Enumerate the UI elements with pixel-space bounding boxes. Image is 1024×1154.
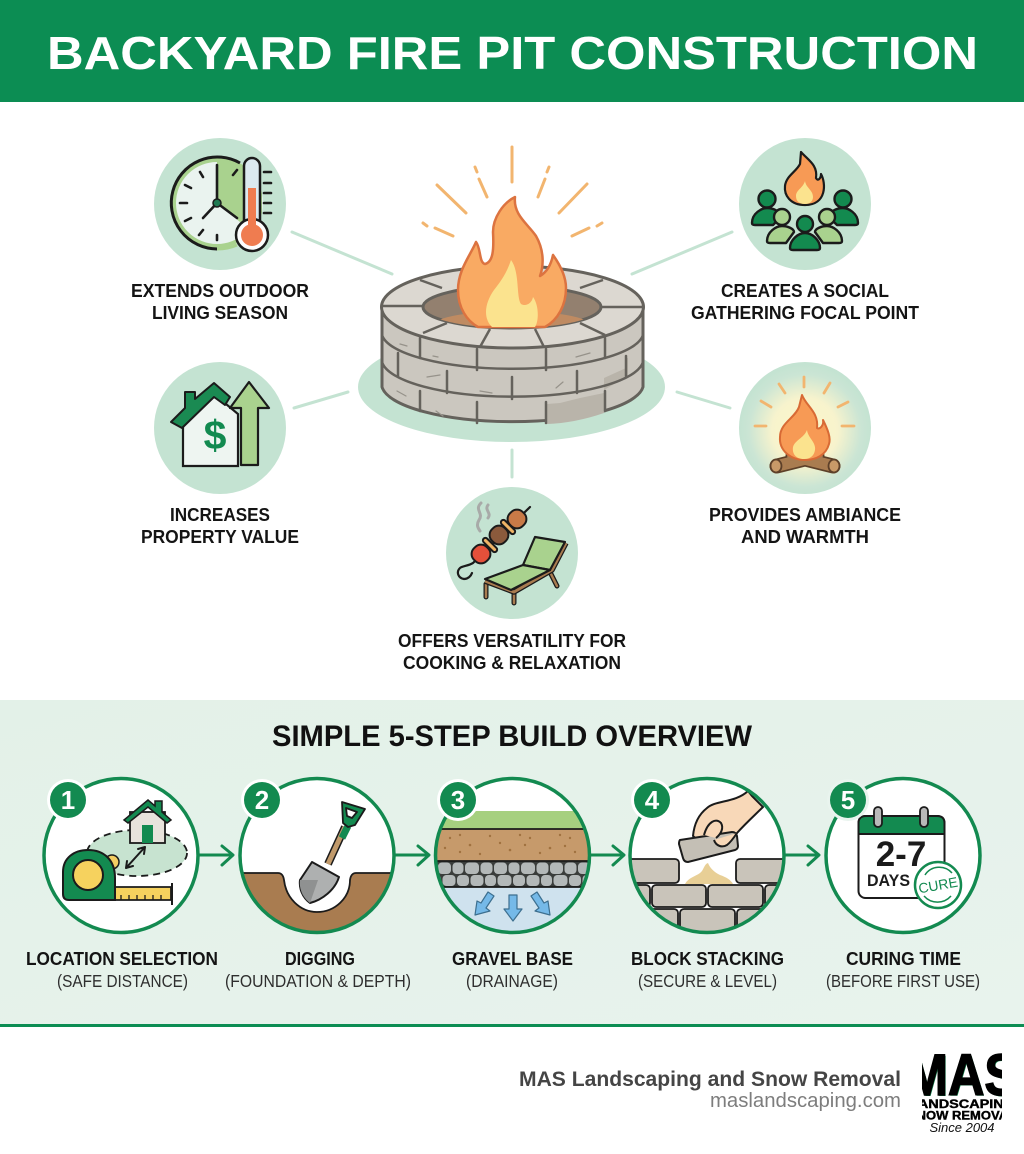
panel: 5-step build overview <box>0 700 1024 1027</box>
step 3 label: GRAVEL BASE <box>452 948 573 969</box>
arrow: 2 to 3 <box>395 846 429 865</box>
step 2: digging <box>240 778 395 940</box>
footer company name: maslandscaping.com <box>710 1090 901 1112</box>
label <box>709 504 901 547</box>
section heading: SIMPLE 5-STEP BUILD OVERVIEW <box>272 720 753 753</box>
step 1 label <box>26 948 218 991</box>
number badge 3: 3 <box>451 785 465 815</box>
label: COOKING & RELAXATION <box>403 652 621 673</box>
label: LIVING SEASON <box>152 302 288 323</box>
label: OFFERS VERSATILITY FOR <box>398 630 626 651</box>
label: PROVIDES AMBIANCE <box>709 504 901 525</box>
step 5: curing time: 2-7 <box>876 835 926 874</box>
step 5 label: (BEFORE FIRST USE) <box>826 971 980 991</box>
step 1: location selection <box>44 778 198 932</box>
step 3 label <box>452 948 573 991</box>
arrow: 4 to 5 <box>785 846 819 865</box>
logo: SNOW REMOVAL <box>908 1108 1016 1122</box>
icon: campfire <box>739 362 871 494</box>
connector lines <box>292 232 732 477</box>
step 3: gravel base <box>430 778 600 937</box>
number badge 5 <box>827 779 869 821</box>
step 3 label: (DRAINAGE) <box>466 971 558 991</box>
step 5 label: CURING TIME <box>846 948 961 969</box>
label: EXTENDS OUTDOOR <box>131 280 309 301</box>
arrow: 1 to 2 <box>199 846 233 865</box>
number badge 1: 1 <box>61 785 75 815</box>
step 4: block stacking <box>628 776 786 934</box>
arrow: 3 to 4 <box>590 846 624 865</box>
step 4 label <box>631 948 784 991</box>
icon: people around fire <box>739 138 871 270</box>
step 5: curing time <box>826 778 980 932</box>
number badge 2: 2 <box>255 785 269 815</box>
label <box>141 504 299 547</box>
step 1 label: (SAFE DISTANCE) <box>57 971 188 991</box>
label: CREATES A SOCIAL <box>721 280 889 301</box>
label <box>398 630 626 673</box>
logo: LANDSCAPING <box>909 1097 1015 1111</box>
step 5 label <box>826 948 980 991</box>
title: BACKYARD FIRE PIT CONSTRUCTION <box>47 27 978 79</box>
number badge 5: 5 <box>841 785 855 815</box>
step 5: curing time: CURE <box>917 874 959 896</box>
flame <box>458 197 566 327</box>
inner flame <box>486 260 538 327</box>
label <box>691 280 920 323</box>
central fire pit illustration <box>358 147 665 442</box>
number badge 3 <box>437 779 479 821</box>
step 5: curing time: DAYS <box>867 872 910 890</box>
logo: Since 2004 <box>929 1120 995 1135</box>
stone wall <box>382 307 643 424</box>
label: GATHERING FOCAL POINT <box>691 302 920 323</box>
step 1 label: LOCATION SELECTION <box>26 948 218 969</box>
label: PROPERTY VALUE <box>141 526 299 547</box>
step 4 label: BLOCK STACKING <box>631 948 784 969</box>
label: INCREASES <box>170 504 270 525</box>
icon: house and arrow <box>154 362 286 494</box>
fire rays <box>423 147 602 236</box>
number badge 2 <box>241 779 283 821</box>
label <box>131 280 309 323</box>
number badge 1 <box>47 779 89 821</box>
fire bowl <box>422 289 602 330</box>
benefit: increases property value <box>141 362 299 547</box>
step 2 label <box>225 948 411 991</box>
header banner <box>0 0 1024 102</box>
footer company name <box>519 1068 901 1112</box>
step 2 label: DIGGING <box>285 948 355 969</box>
label: AND WARMTH <box>741 526 869 547</box>
benefit: versatility <box>398 487 626 673</box>
benefit: social gathering <box>691 138 920 323</box>
icon: house and arrow: $ <box>204 412 227 458</box>
icon: skewer and lounge chair <box>446 487 578 619</box>
step 2 label: (FOUNDATION & DEPTH) <box>225 971 411 991</box>
benefit: ambiance and warmth <box>709 362 901 547</box>
ground shadow <box>358 332 665 442</box>
footer company name: MAS Landscaping and Snow Removal <box>519 1068 901 1091</box>
icon: clock and thermometer <box>154 138 286 270</box>
logo <box>922 1053 1002 1132</box>
stone cap <box>382 266 644 348</box>
step 4 label: (SECURE & LEVEL) <box>638 971 777 991</box>
number badge 4 <box>631 779 673 821</box>
number badge 4: 4 <box>645 785 660 815</box>
benefit: extends outdoor living season <box>131 138 309 323</box>
